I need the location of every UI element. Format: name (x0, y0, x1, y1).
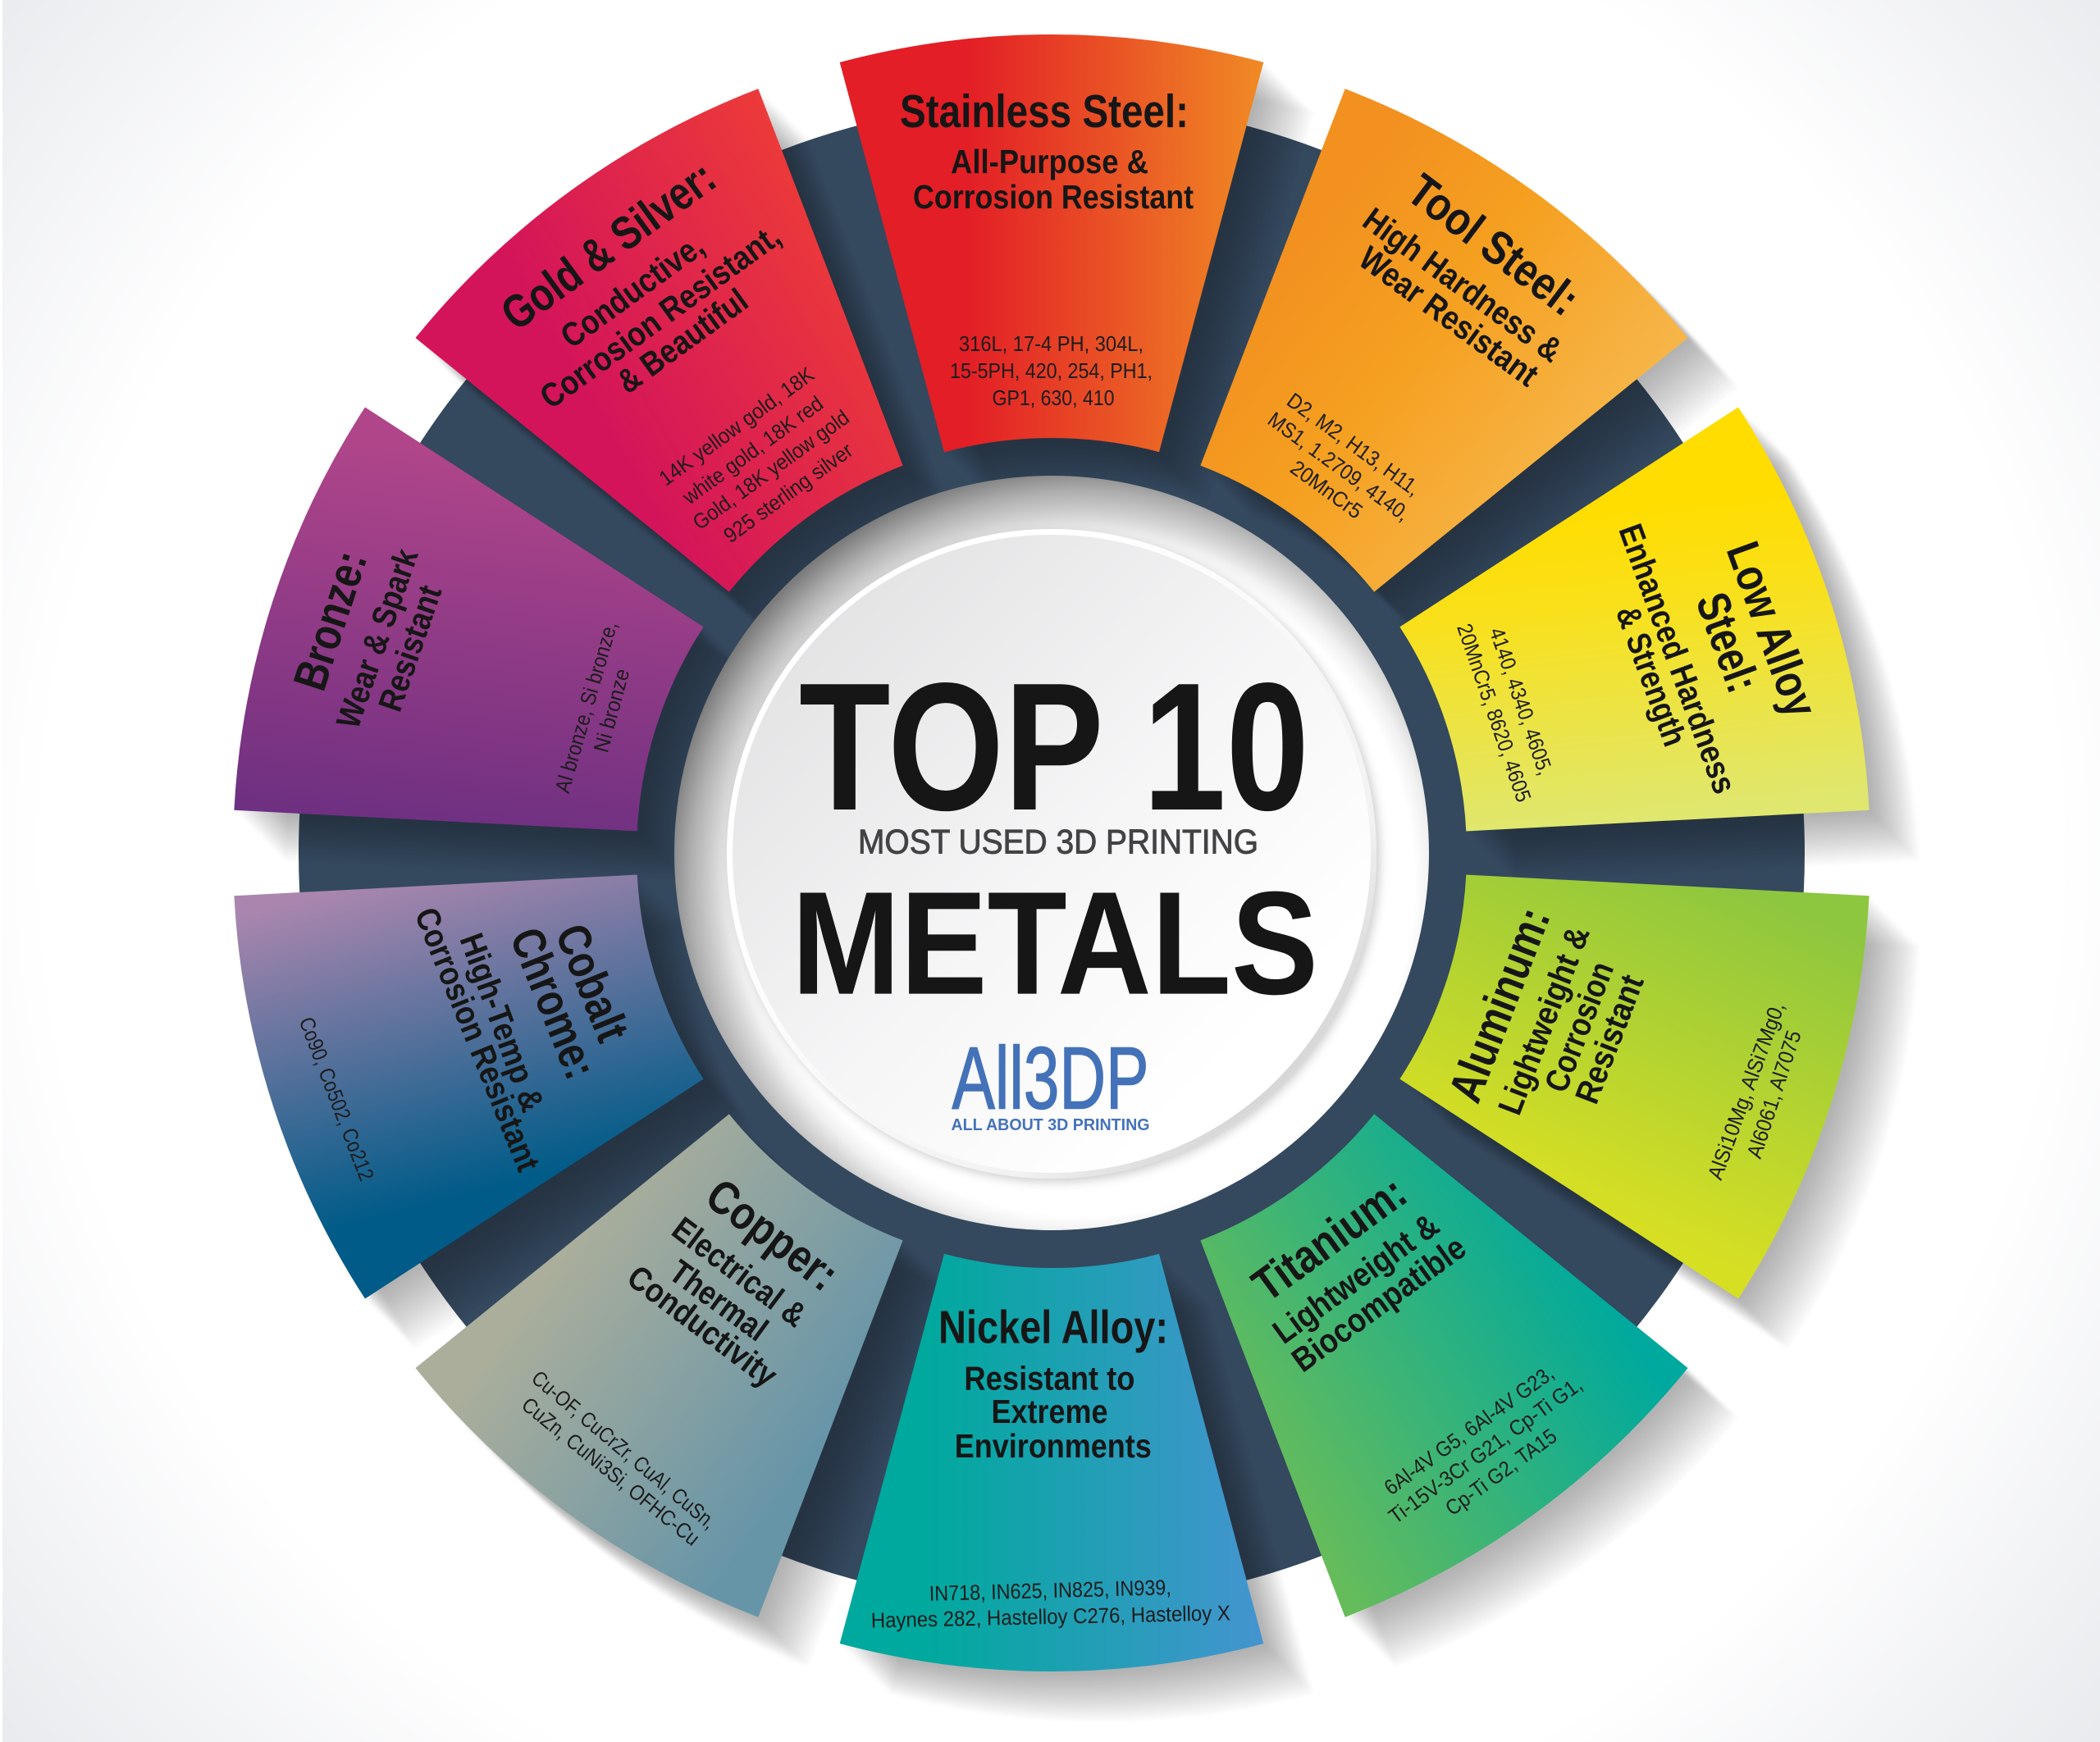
alloy list: Cp-Ti G2, TA15 (1440, 1424, 1561, 1521)
heading: Stainless Steel: (900, 85, 1189, 138)
subheading: Conductivity (620, 1257, 785, 1394)
alloy list: GP1, 630, 410 (993, 385, 1114, 410)
alloy list: D2, M2, H13, H11, (1282, 388, 1425, 501)
panel: titanium (1200, 1114, 1688, 1617)
alloy list: 14K yellow gold, 18K (654, 362, 819, 490)
subheading: High-Temp & (453, 928, 552, 1117)
alloy list: IN718, IN625, IN825, IN939, (929, 1575, 1171, 1606)
subheading: All-Purpose & (951, 143, 1148, 180)
title: top 10: TOP 10 (799, 645, 1309, 849)
alloy list: Cu-OF, CuCrZr, CuAl, CuSn, (527, 1366, 721, 1534)
panel: cobalt chrome (234, 874, 704, 1299)
subheading: Resistant (1568, 969, 1651, 1109)
alloy list: 6Al-4V G5, 6Al-4V G23, (1380, 1361, 1559, 1500)
panel: stainless steel (840, 34, 1263, 452)
alloy list: Co90, Co502, Co212 (294, 1014, 379, 1184)
subheading: Thermal (663, 1252, 775, 1348)
subtitle: MOST USED 3D PRINTING (858, 822, 1258, 861)
subheading: Biocompatible (1285, 1229, 1472, 1379)
logo: All3DP: All3DP (952, 1028, 1149, 1127)
subheading: Wear & Spark (329, 544, 426, 733)
alloy list: white gold, 18K red (678, 391, 828, 509)
panel: aluminum (1399, 874, 1869, 1299)
subheading: Corrosion Resistant, (533, 217, 788, 416)
heading: Tool Steel: (1398, 164, 1589, 326)
alloy list: MS1, 1.2709, 4140, (1263, 407, 1414, 526)
subheading: Electrical & (665, 1210, 814, 1334)
centre disc (727, 529, 1376, 1179)
subheading: Enhanced Hardness (1611, 519, 1744, 799)
panel: nickel alloy (840, 1254, 1263, 1671)
heading: Aluminum: (1439, 901, 1561, 1109)
subheading (913, 143, 1194, 216)
heading: Cobalt (545, 917, 639, 1049)
alloy list (654, 362, 857, 548)
logo: All3DP: ALL ABOUT 3D PRINTING (952, 1116, 1150, 1134)
alloy list (871, 1575, 1230, 1633)
subheading: Corrosion (1537, 956, 1621, 1097)
alloy list: 925 sterling silver (719, 437, 857, 548)
heading: Low Alloy (1716, 535, 1828, 724)
alloy list (950, 331, 1153, 410)
alloy list: Gold, 18K yellow gold (688, 405, 854, 535)
navy ring (299, 100, 1805, 1606)
subheading (1491, 921, 1651, 1120)
subheading (620, 1210, 814, 1394)
subheading: Environments (955, 1427, 1152, 1465)
alloy list: 4140, 4340, 4605, (1485, 624, 1558, 778)
alloy list: Ni bronze (588, 666, 634, 755)
heading: Chrome: (500, 920, 607, 1086)
alloy list: 20MnCr5 (1286, 455, 1367, 524)
subheading: Extreme (991, 1393, 1107, 1430)
centre hole with shading (674, 476, 1429, 1230)
subheading: Resistant (371, 581, 449, 716)
title: metals: METALS (792, 861, 1318, 1025)
heading: Bronze: (284, 545, 377, 696)
alloy list: Al6061, Al7075 (1742, 1028, 1806, 1161)
panel: copper (415, 1114, 903, 1617)
subheading: & Strength (1609, 601, 1694, 751)
subheading: Resistant to (964, 1360, 1134, 1398)
subheading: High Hardness & (1356, 200, 1569, 370)
subheading: Lightweight & (1491, 921, 1597, 1120)
subheading: Wear Resistant (1352, 239, 1545, 394)
subheading: & Beautiful (609, 281, 755, 401)
alloy list: Ti-15V-3Cr G21, Cp-Ti G1, (1384, 1372, 1586, 1529)
alloy list: 15-5PH, 420, 254, PH1, (950, 358, 1153, 383)
subheading: Corrosion Resistant (408, 902, 547, 1177)
panel: low alloy steel (1399, 407, 1869, 832)
alloy list: Haynes 282, Hastelloy C276, Hastelloy X (871, 1600, 1230, 1633)
heading (1686, 535, 1828, 724)
subheading: Conductive, (554, 226, 711, 355)
heading: Titanium: (1243, 1166, 1417, 1312)
long panel shadows (238, 39, 1919, 1721)
panel: gold and silver (415, 89, 903, 592)
alloy list: 20MnCr5, 8620, 4605 (1452, 620, 1536, 805)
panel: bronze (234, 407, 704, 832)
heading: Copper: (696, 1169, 848, 1302)
heading: Nickel Alloy: (938, 1301, 1168, 1353)
alloy list: 316L, 17-4 PH, 304L, (959, 331, 1144, 356)
alloy list: AlSi10Mg, AlSi7Mg0, (1702, 999, 1790, 1183)
alloy list: Al bronze, Si bronze, (550, 618, 623, 796)
subheading: Corrosion Resistant (913, 178, 1194, 216)
subheading (955, 1360, 1152, 1465)
heading: Steel: (1686, 586, 1769, 700)
alloy list: CuZn, CuNi3Si, OFHC-Cu (517, 1392, 705, 1551)
heading: Gold & Silver: (491, 151, 725, 340)
logo: All3DP (952, 1028, 1150, 1134)
subheading: Lightweight & (1266, 1206, 1446, 1351)
panel: tool steel (1200, 89, 1688, 592)
